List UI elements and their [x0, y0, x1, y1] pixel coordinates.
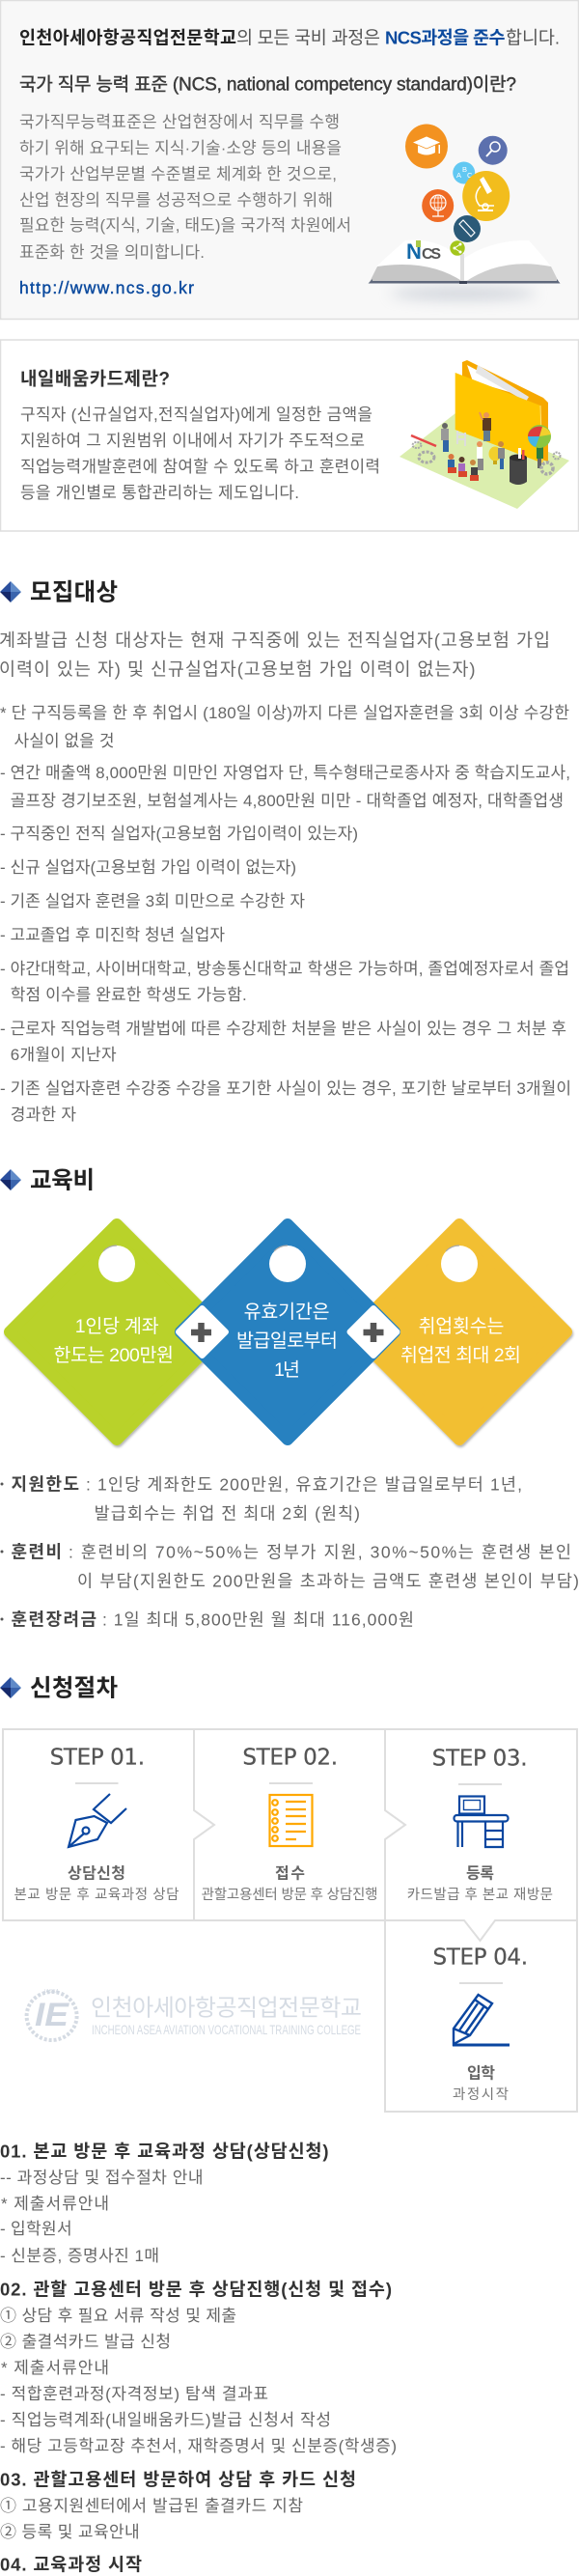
- text block: 직업능력개발훈련에 참여할 수 있도록 하고 훈련이력: [20, 458, 380, 476]
- step 3: STEP 03.: [432, 1746, 527, 1771]
- headline: 의 모든 국비 과정은: [236, 27, 380, 48]
- section heading: 교육비: [0, 1166, 95, 1193]
- standing presenter: [480, 412, 491, 441]
- panel: 내일배움카드제: [0, 340, 579, 531]
- text block: step 1 details: * 제출서류안내: [1, 2195, 109, 2213]
- icon: pencil: [453, 1995, 510, 2045]
- NCS logo: [406, 239, 441, 264]
- text block: eligibility lead: 이력이 있는 자) 및 신규실업자(고용보험 가입 이력이 없는자): [0, 658, 475, 680]
- diamond: validity period: 유효기간은: [244, 1302, 330, 1323]
- text block: step 3 details: ② 등록 및 교육안내: [0, 2523, 140, 2541]
- heading: what is NCS: 국가 직무 능력 표준 (NCS, national competency standard)이란?: [19, 73, 516, 95]
- heading: 내일배움카드제란?: [20, 369, 170, 390]
- school logo watermark: INCHEON ASEA AVIATION VOCATIONAL TRAINING COLLEGE: [92, 2022, 361, 2037]
- diamond: benefit deadline: [352, 1224, 566, 1440]
- text block: 지원하여 그 지원범위 이내에서 자기가 주도적으로: [20, 432, 365, 450]
- school logo watermark: [27, 1989, 362, 2040]
- text block: step 1 details: -- 과정상담 및 접수절차 안내: [0, 2169, 203, 2187]
- text block: step 4 details: 04. 교육과정 시작: [0, 2555, 142, 2574]
- icon: share: [450, 240, 465, 256]
- text block: step 3 details: 03. 관할고용센터 방문하여 상담 후 카드 신청: [0, 2470, 356, 2489]
- right person: [498, 441, 505, 469]
- text block: tuition details: 지원한도: [12, 1475, 79, 1495]
- text block: step 2 details: - 해당 고등학교장 추천서, 재학증명서 및 신분증(학생증): [0, 2437, 397, 2455]
- seated audience: [448, 441, 483, 481]
- text block: 구직자 (신규실업자,전직실업자)에게 일정한 금액을: [20, 406, 372, 424]
- step 3: 카드발급 후 본교 재방문: [407, 1887, 553, 1903]
- pencil cup: [510, 448, 527, 485]
- text block: step 2 details: 02. 관할 고용센터 방문 후 상담진행(신청 및 접수): [0, 2279, 392, 2300]
- text block: step 3 details: [0, 2470, 356, 2541]
- icon: ABC: C: [467, 171, 473, 180]
- link: NCS URL: http://www.ncs.go.kr: [19, 278, 194, 297]
- NCS logo: CS: [422, 246, 441, 263]
- list: eligibility criteria: - 신규 실업자(고용보험 가입 이력이 없는자): [0, 858, 296, 877]
- list: eligibility criteria: - 근로자 직업능력 개발법에 따른 수강제한 처분을 받은 사실이 있는 경우 그 처분 후: [0, 1020, 566, 1038]
- headline: 인천아세아항공직업전문학교: [19, 27, 236, 48]
- list: eligibility criteria: 사실이 없을 것: [14, 732, 114, 750]
- text block: NCS definition: 필요한 능력(지식, 기술, 태도)을 국가적 차원에서: [19, 216, 351, 235]
- emblem: IASEA: [44, 1989, 60, 1995]
- list: eligibility criteria: - 연간 매출액 8,000만원 미만인 자영업자 단, 특수형태근로종사자 중 학습지도교사,: [0, 764, 570, 782]
- text block: step 2 details: - 직업능력계좌(내일배움카드)발급 신청서 작성: [0, 2411, 331, 2429]
- process: application steps: [3, 1729, 577, 2112]
- diamond: account limit: 1인당 계좌: [75, 1316, 159, 1337]
- icon: ABC: [453, 162, 475, 183]
- diamond: benefit deadline: 취업전 최대 2회: [400, 1345, 521, 1366]
- step 1: 상담신청: [68, 1865, 125, 1883]
- text block: eligibility lead: 계좌발급 신청 대상자는 현재 구직중에 있는 전직실업자(고용보험 가입: [0, 630, 550, 651]
- section heading: 교육비: 교육비: [30, 1166, 95, 1193]
- text block: step 2 details: ② 출결석카드 발급 신청: [0, 2333, 171, 2351]
- text block: step 2 details: ① 상담 후 필요 서류 작성 및 제출: [0, 2307, 236, 2325]
- text block: [20, 406, 380, 502]
- text block: step 3 details: ① 고용지원센터에서 발급된 출결카드 지참: [0, 2497, 303, 2515]
- emblem: IE: [35, 1997, 69, 2033]
- icon: blue diamond: [0, 1677, 21, 1698]
- step frames and arrows: [3, 1729, 577, 2112]
- text block: NCS definition: 산업 현장의 직무를 성공적으로 수행하기 위해: [19, 191, 333, 210]
- text block: tuition details: 훈련장려금: [12, 1610, 96, 1630]
- headline: [19, 27, 560, 48]
- text block: step 1 details: [0, 2142, 329, 2265]
- text block: tuition details: 이 부담(지원한도 200만원을 초과하는 금액도 훈련생 본인이 부담): [77, 1572, 579, 1591]
- text block: tuition details: [0, 1475, 579, 1630]
- step 1: 본교 방문 후 교육과정 상담: [14, 1887, 179, 1903]
- text block: tuition details: 훈련비: [12, 1543, 62, 1562]
- green person with pie chart: [528, 425, 551, 468]
- school logo watermark: 인천아세아항공직업전문학교: [91, 1995, 362, 2022]
- step 4: 과정시작: [453, 2086, 509, 2103]
- list: eligibility criteria: - 기존 실업자 훈련을 3회 미만으로 수강한 자: [0, 892, 305, 910]
- text block: step 2 details: - 적합훈련과정(자격정보) 탐색 결과표: [0, 2385, 268, 2403]
- text block: tuition details: : 훈련비의 70%~50%는 정부가 지원, 30%~50%는 훈련생 본인: [69, 1543, 571, 1562]
- step 2: [202, 1746, 378, 1903]
- icon: blue diamond: [0, 581, 21, 602]
- gears: [413, 442, 560, 474]
- headline: NCS과정을 준수: [385, 27, 506, 48]
- text block: NCS definition: 국가가 산업부문별 수준별로 체계화 한 것으로,: [19, 165, 337, 183]
- diamond: validity period: 1년: [274, 1359, 300, 1381]
- ladder: [457, 431, 465, 446]
- headline: 합니다.: [506, 27, 560, 48]
- list: eligibility criteria: - 야간대학교, 사이버대학교, 방송통신대학교 학생은 가능하며, 졸업예정자로서 졸업: [0, 960, 569, 978]
- diamond: account limit: [10, 1224, 224, 1440]
- icon: microscope: [462, 171, 510, 221]
- icon: ruler: [454, 215, 481, 242]
- text block: step 2 details: [0, 2279, 397, 2455]
- red pencil: [411, 435, 436, 446]
- light bulb: [488, 446, 502, 464]
- list: eligibility criteria: 학점 이수를 완료한 학생도 가능함.: [11, 986, 247, 1004]
- icon: graduation cap: [405, 124, 448, 168]
- icon: ABC: B: [462, 165, 467, 174]
- list: eligibility criteria: * 단 구직등록을 한 후 취업시 (180일 이상)까지 다른 실업자훈련을 3회 이상 수강한: [0, 704, 569, 722]
- diagram: tuition diamonds: [10, 1224, 566, 1440]
- step 3: 등록: [466, 1865, 494, 1883]
- icon: ABC: A: [456, 171, 461, 180]
- step 2: STEP 02.: [242, 1746, 338, 1771]
- icon: fountain pen: [69, 1794, 126, 1847]
- icon: globe: [422, 189, 454, 222]
- icon: magnifier: [479, 136, 508, 165]
- left person: [441, 423, 449, 452]
- text block: step 1 details: - 입학원서: [0, 2220, 72, 2238]
- text block: 등을 개인별로 통합관리하는 제도입니다.: [20, 484, 299, 502]
- diamond: validity period: [180, 1224, 395, 1440]
- step 1: [14, 1746, 179, 1903]
- NCS logo: N: [406, 239, 422, 264]
- diamond: account limit: 한도는 200만원: [54, 1345, 174, 1366]
- icon: desk with computer: [454, 1796, 508, 1847]
- list: eligibility criteria: [0, 704, 571, 1124]
- plus sign right: [349, 1308, 398, 1356]
- text block: NCS definition: 하기 위해 요구되는 지식·기술·소양 등의 내용을: [19, 139, 342, 157]
- text block: tuition details: : 1인당 계좌한도 200만원, 유효기간은 발급일로부터 1년,: [86, 1475, 522, 1495]
- step 1: STEP 01.: [50, 1746, 145, 1771]
- diamond: validity period: 발급일로부터: [236, 1330, 338, 1352]
- section heading: 모집대상: 모집대상: [30, 579, 118, 606]
- section heading: 신청절차: 신청절차: [30, 1674, 118, 1701]
- list: eligibility criteria: - 기존 실업자훈련 수강중 수강을 포기한 사실이 있는 경우, 포기한 날로부터 3개월이: [0, 1079, 571, 1098]
- icon: document: [270, 1795, 313, 1846]
- text block: tuition details: 발급회수는 취업 전 최대 2회 (원칙): [95, 1504, 360, 1524]
- text block: step 1 details: 01. 본교 방문 후 교육과정 상담(상담신청): [0, 2142, 329, 2161]
- list: eligibility criteria: 골프장 경기보조원, 보험설계사는 4,800만원 미만 - 대학졸업 예정자, 대학졸업생: [11, 792, 564, 810]
- text block: NCS definition: [19, 113, 351, 262]
- step 4: [432, 1945, 528, 2103]
- step 3: [407, 1746, 553, 1903]
- text block: eligibility lead: [0, 630, 550, 680]
- text block: tuition details: : 1일 최대 5,800만원 월 최대 116,000원: [102, 1610, 414, 1630]
- text block: step 1 details: - 신분증, 증명사진 1매: [0, 2247, 159, 2265]
- text block: NCS definition: 국가직무능력표준은 산업현장에서 직무를 수행: [19, 113, 340, 131]
- list: eligibility criteria: 경과한 자: [11, 1106, 76, 1124]
- diamond: benefit deadline: 취업횟수는: [419, 1316, 504, 1337]
- emblem: [27, 1989, 77, 2040]
- plus sign left: [179, 1308, 226, 1356]
- step 4: STEP 04.: [432, 1945, 528, 1970]
- list: eligibility criteria: - 구직중인 전직 실업자(고용보험 가입이력이 있는자): [0, 825, 358, 843]
- text block: step 2 details: * 제출서류안내: [1, 2359, 109, 2377]
- step 2: 접수: [275, 1865, 305, 1883]
- list: eligibility criteria: 6개월이 지난자: [11, 1046, 117, 1064]
- step 2: 관할고용센터 방문 후 상담진행: [202, 1887, 378, 1903]
- illustration: open book with icons: [369, 124, 560, 300]
- illustration: folder and people: [400, 360, 569, 509]
- panel: NCS introduction: [0, 0, 579, 319]
- list: eligibility criteria: - 고교졸업 후 미진학 청년 실업자: [0, 926, 225, 944]
- step 4: 입학: [467, 2064, 495, 2082]
- text block: NCS definition: 표준화 한 것을 의미합니다.: [19, 243, 205, 262]
- icon: blue diamond: [0, 1169, 21, 1190]
